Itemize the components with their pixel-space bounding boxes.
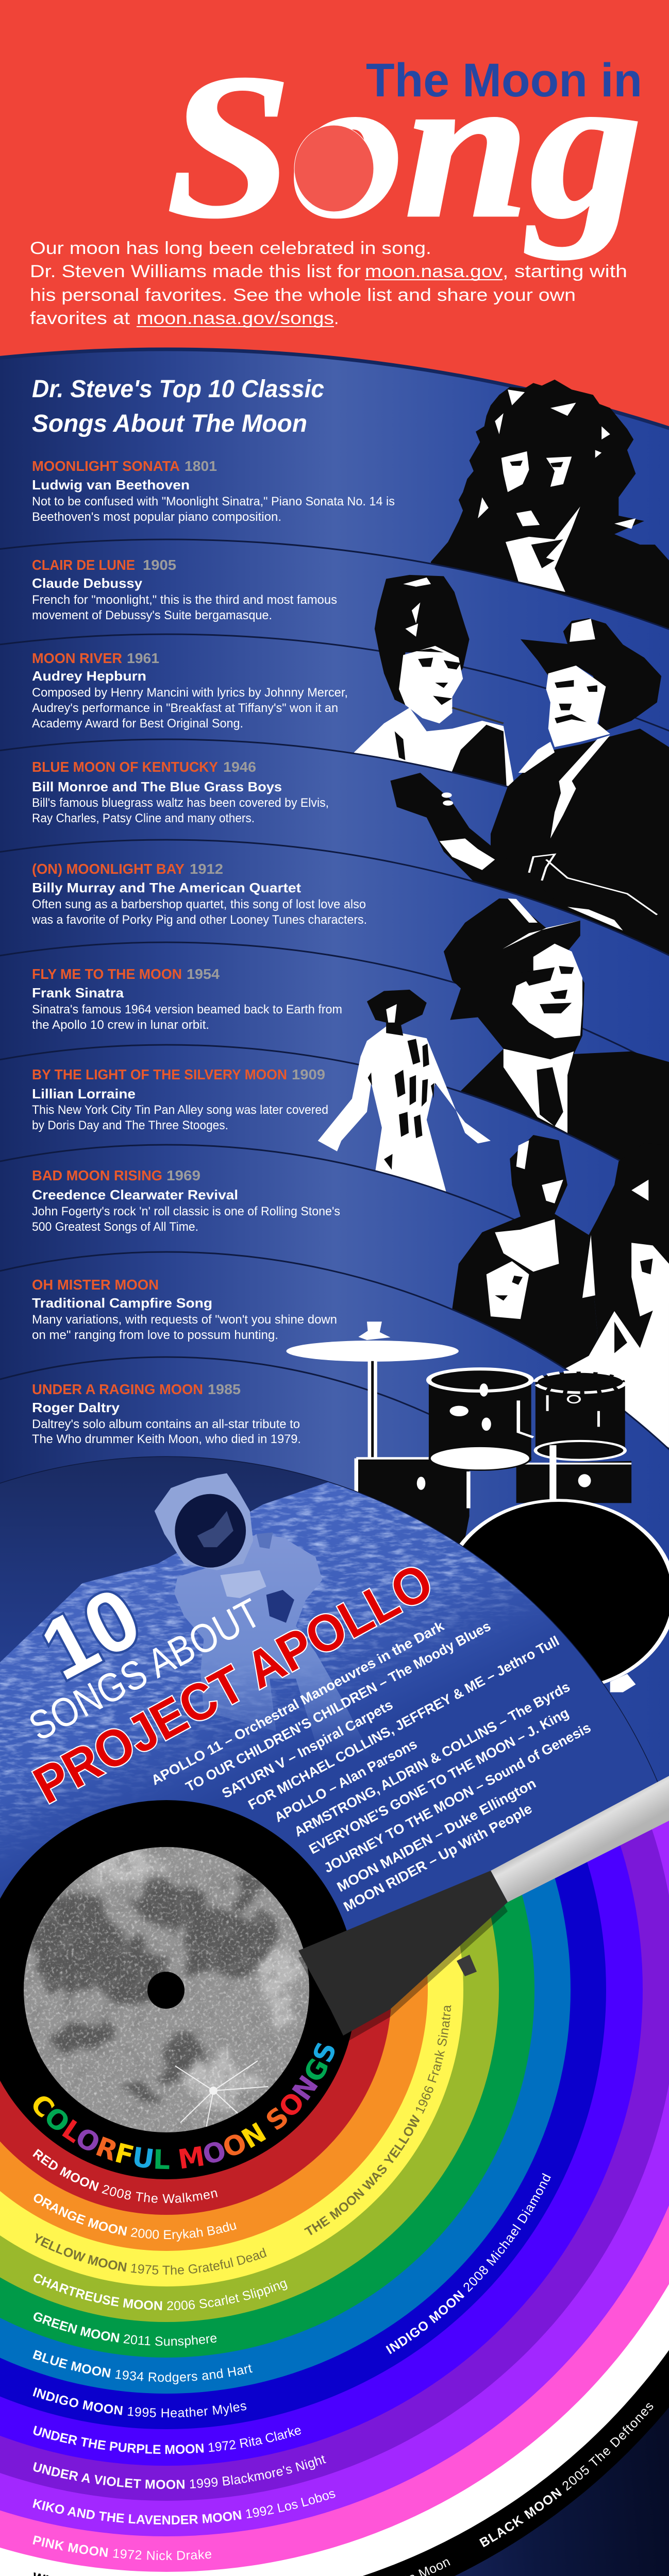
number 10: 10 [26, 1569, 155, 1698]
song: Under a Raging Moon: The Who drummer Keith Moon, who died in 1979. [32, 1432, 301, 1446]
song: Moon River [32, 650, 348, 731]
song: Fly Me to the Moon: FLY ME TO THE MOON [32, 966, 182, 982]
song: By the Light of the Silvery Moon: BY THE LIGHT OF THE SILVERY MOON [32, 1066, 287, 1082]
rainbow song labels: RED MOON 2008 The Walkmen [32, 2148, 218, 2203]
song: Bad Moon Rising [32, 1167, 340, 1234]
song: Bad Moon Rising: 1969 [166, 1167, 200, 1183]
rainbow song labels [30, 2005, 657, 2576]
heading: top 10: Songs About The Moon [32, 410, 307, 437]
portrait: Frank Sinatra [444, 899, 669, 1193]
song: (On) Moonlight Bay: Billy Murray and The American Quartet [32, 880, 301, 895]
song: Clair de Lune: French for "moonlight," this is the third and most famous [32, 593, 337, 607]
song list: MOON MAIDEN – Duke Ellington [334, 1775, 539, 1895]
groove mask [0, 1045, 669, 2576]
rainbow song labels: CHARTREUSE MOON 2006 Scarlet Slipping [34, 2274, 288, 2310]
song: Blue Moon of Kentucky: Bill Monroe and The Blue Grass Boys [32, 779, 282, 794]
song: Under a Raging Moon: Daltrey's solo album contains an all-star tribute to [32, 1417, 300, 1431]
song: Oh Mister Moon: Many variations, with requests of "won't you shine down [32, 1313, 337, 1327]
rainbow song labels: UNDER A VIOLET MOON 1999 Blackmore's Night [33, 2455, 326, 2489]
song: Fly Me to the Moon [32, 966, 342, 1032]
illustration: astronaut on the lunar surface [0, 1473, 658, 1869]
panel: Apollo section background [0, 1456, 658, 1930]
song: (On) Moonlight Bay [31, 861, 367, 927]
groove mask [0, 1145, 669, 2576]
portrait: Lillian Lorraine [318, 990, 491, 1199]
song: (On) Moonlight Bay: was a favorite of Porky Pig and other Looney Tunes characters. [31, 913, 367, 927]
song: Under a Raging Moon: 1985 [208, 1381, 241, 1397]
song: Bad Moon Rising: John Fogerty's rock 'n' roll classic is one of Rolling Stone's [32, 1205, 340, 1218]
song: Fly Me to the Moon: Sinatra's famous 1964 version beamed back to Earth from [32, 1003, 342, 1016]
rainbow song labels: ORANGE MOON 2000 Erykah Badu [34, 2194, 237, 2242]
intro paragraph: his personal favorites. See the whole list and share your own [30, 285, 576, 305]
song: Under a Raging Moon [32, 1381, 301, 1446]
song: Moon River: Audrey Hepburn [32, 668, 146, 684]
illustration: tonearm [298, 1776, 669, 2043]
song list: APOLLO – Alan Parsons [272, 1736, 420, 1825]
song: Oh Mister Moon: OH MISTER MOON [32, 1277, 159, 1293]
song list: APOLLO 11 – Orchestral Manoeuvres in the Dark [148, 1618, 447, 1788]
song: Moon River: 1961 [127, 650, 159, 666]
song: Blue Moon of Kentucky [32, 759, 329, 825]
intro paragraph: moon.nasa.gov/songs [137, 309, 334, 328]
title block [166, 32, 642, 261]
song: Clair de Lune: 1905 [143, 557, 176, 573]
song: By the Light of the Silvery Moon: by Doris Day and The Three Stooges. [32, 1118, 228, 1132]
song: Fly Me to the Moon: 1954 [187, 966, 220, 982]
song: Moon River: Audrey's performance in "Breakfast at Tiffany's" won it an [32, 701, 338, 715]
chart: rainbow record bands [0, 1821, 669, 2576]
song: Blue Moon of Kentucky: Bill's famous bluegrass waltz has been covered by Elvis, [32, 796, 329, 810]
song: Moon River: Composed by Henry Mancini with lyrics by Johnny Mercer, [32, 686, 348, 700]
groove mask [0, 840, 669, 2576]
song list [148, 1618, 593, 1914]
intro paragraph: Dr. Steven Williams made this list for [30, 262, 361, 281]
song: Clair de Lune: CLAIR DE LUNE [32, 557, 135, 573]
song: (On) Moonlight Bay: (ON) MOONLIGHT BAY [32, 861, 185, 877]
song: (On) Moonlight Bay: 1912 [190, 861, 223, 877]
intro paragraph: moon.nasa.gov [365, 262, 503, 281]
song list: SATURN V – Inspiral Carpets [220, 1697, 395, 1801]
song list: TO OUR CHILDREN'S CHILDREN – The Moody Blues [183, 1618, 493, 1795]
record label black ring [0, 1800, 356, 2179]
heading: top 10 [32, 376, 324, 437]
song list: JOURNEY TO THE MOON – Sound of Genesis [321, 1720, 593, 1876]
song: Blue Moon of Kentucky: Ray Charles, Patsy Cline and many others. [32, 811, 255, 825]
song: Blue Moon of Kentucky: 1946 [223, 759, 256, 775]
intro paragraph: favorites at [30, 309, 130, 328]
song: Moonlight Sonata: Ludwig van Beethoven [32, 477, 190, 493]
intro paragraph: Our moon has long been celebrated in song. [30, 239, 431, 258]
song: Bad Moon Rising: 500 Greatest Songs of All Time. [32, 1220, 198, 1234]
song: Bad Moon Rising: BAD MOON RISING [32, 1167, 162, 1183]
song: Bad Moon Rising: Creedence Clearwater Revival [32, 1187, 238, 1202]
song: Moonlight Sonata: 1801 [185, 458, 217, 474]
groove lines [0, 539, 669, 2576]
song: Oh Mister Moon [32, 1277, 337, 1342]
song: Under a Raging Moon: Roger Daltry [32, 1400, 120, 1415]
song: Moon River: MOON RIVER [32, 650, 122, 666]
song: By the Light of the Silvery Moon: Lillian Lorraine [32, 1086, 136, 1101]
illustration: moon record centre [24, 1847, 309, 2132]
song: Fly Me to the Moon: Frank Sinatra [32, 985, 124, 1001]
intro paragraph: . [334, 309, 339, 328]
song: Clair de Lune: Claude Debussy [32, 575, 143, 591]
song: Blue Moon of Kentucky: BLUE MOON OF KENTUCKY [32, 759, 218, 775]
song: Moonlight Sonata: MOONLIGHT SONATA [32, 458, 180, 474]
portrait: Creedence Clearwater Revival [452, 1135, 669, 1474]
rainbow song labels: YELLOW MOON 1975 The Grateful Dead [35, 2233, 267, 2275]
song: Moonlight Sonata: Beethoven's most popular piano composition. [32, 510, 281, 524]
heading: Apollo [21, 1552, 593, 1914]
rainbow song labels: PINK MOON 1972 Nick Drake [33, 2535, 211, 2561]
song: Under a Raging Moon: UNDER A RAGING MOON [32, 1381, 203, 1397]
groove mask [0, 739, 669, 2576]
song list: ARMSTRONG, ALDRIN & COLLINS – The Byrds [292, 1679, 573, 1840]
song: Oh Mister Moon: on me" ranging from love to possum hunting. [32, 1328, 278, 1342]
song: By the Light of the Silvery Moon: This New York City Tin Pan Alley song was later covered [32, 1103, 328, 1117]
song: Clair de Lune: movement of Debussy's Suite bergamasque. [32, 608, 272, 622]
song: Moonlight Sonata: Not to be confused with "Moonlight Sinatra," Piano Sonata No. 14 is [32, 495, 395, 509]
song: Moon River: Academy Award for Best Original Song. [32, 717, 243, 731]
intro paragraph [30, 239, 627, 328]
project apollo: PROJECT APOLLO [25, 1552, 442, 1815]
song: Oh Mister Moon: Traditional Campfire Song [32, 1295, 212, 1311]
rainbow song labels: GREEN MOON 2011 Sunsphere [34, 2312, 216, 2348]
title: The Moon in: The Moon in [366, 54, 642, 107]
portrait: Beethoven [427, 380, 669, 663]
rainbow song labels: INDIGO MOON 2008 Michael Diamond [386, 2173, 551, 2354]
dark lower background [455, 2408, 669, 2576]
illustration: drum kit [286, 1321, 669, 1692]
rainbow song labels: INDIGO MOON 1995 Heather Myles [33, 2387, 246, 2417]
intro paragraph: , starting with [503, 262, 627, 281]
song list: FOR MICHAEL COLLINS, JEFFREY & ME – Jethro Tull [246, 1633, 562, 1813]
song: Moonlight Sonata [32, 458, 395, 524]
groove mask [0, 1252, 669, 2576]
rainbow song labels: BLACK MOON 2005 The Deftones [479, 2403, 654, 2547]
portrait: Bill Monroe [390, 618, 669, 1044]
song: Fly Me to the Moon: the Apollo 10 crew in lunar orbit. [32, 1018, 209, 1032]
heading: top 10: Dr. Steve's Top 10 Classic [32, 376, 324, 403]
song: By the Light of the Silvery Moon [32, 1066, 328, 1132]
icon: moon in the letter o [294, 125, 374, 212]
heading: Colorful Moon Songs: COLORFUL MOON SONGS [24, 2038, 343, 2176]
song list: EVERYONE'S GONE TO THE MOON – J. King [307, 1705, 572, 1857]
song: Clair de Lune [32, 557, 337, 622]
rainbow song labels: UNDER THE PURPLE MOON 1972 Rita Clarke [33, 2426, 301, 2454]
song list: MOON RIDER – Up With People [341, 1801, 534, 1914]
rainbow song labels: THE MOON WAS YELLOW 1966 Frank Sinatra [304, 2005, 451, 2235]
song: (On) Moonlight Bay: Often sung as a barbershop quartet, this song of lost love also [32, 897, 366, 911]
songs about: SONGS ABOUT [21, 1589, 268, 1750]
song: By the Light of the Silvery Moon: 1909 [292, 1066, 325, 1082]
rainbow song labels: KIKO AND THE LAVENDER MOON 1992 Los Lobos [33, 2491, 336, 2524]
portrait: Audrey Hepburn [354, 575, 519, 807]
rainbow song labels: BLUE MOON 1934 Rodgers and Hart [33, 2350, 253, 2384]
title: Song: Song [166, 32, 642, 261]
